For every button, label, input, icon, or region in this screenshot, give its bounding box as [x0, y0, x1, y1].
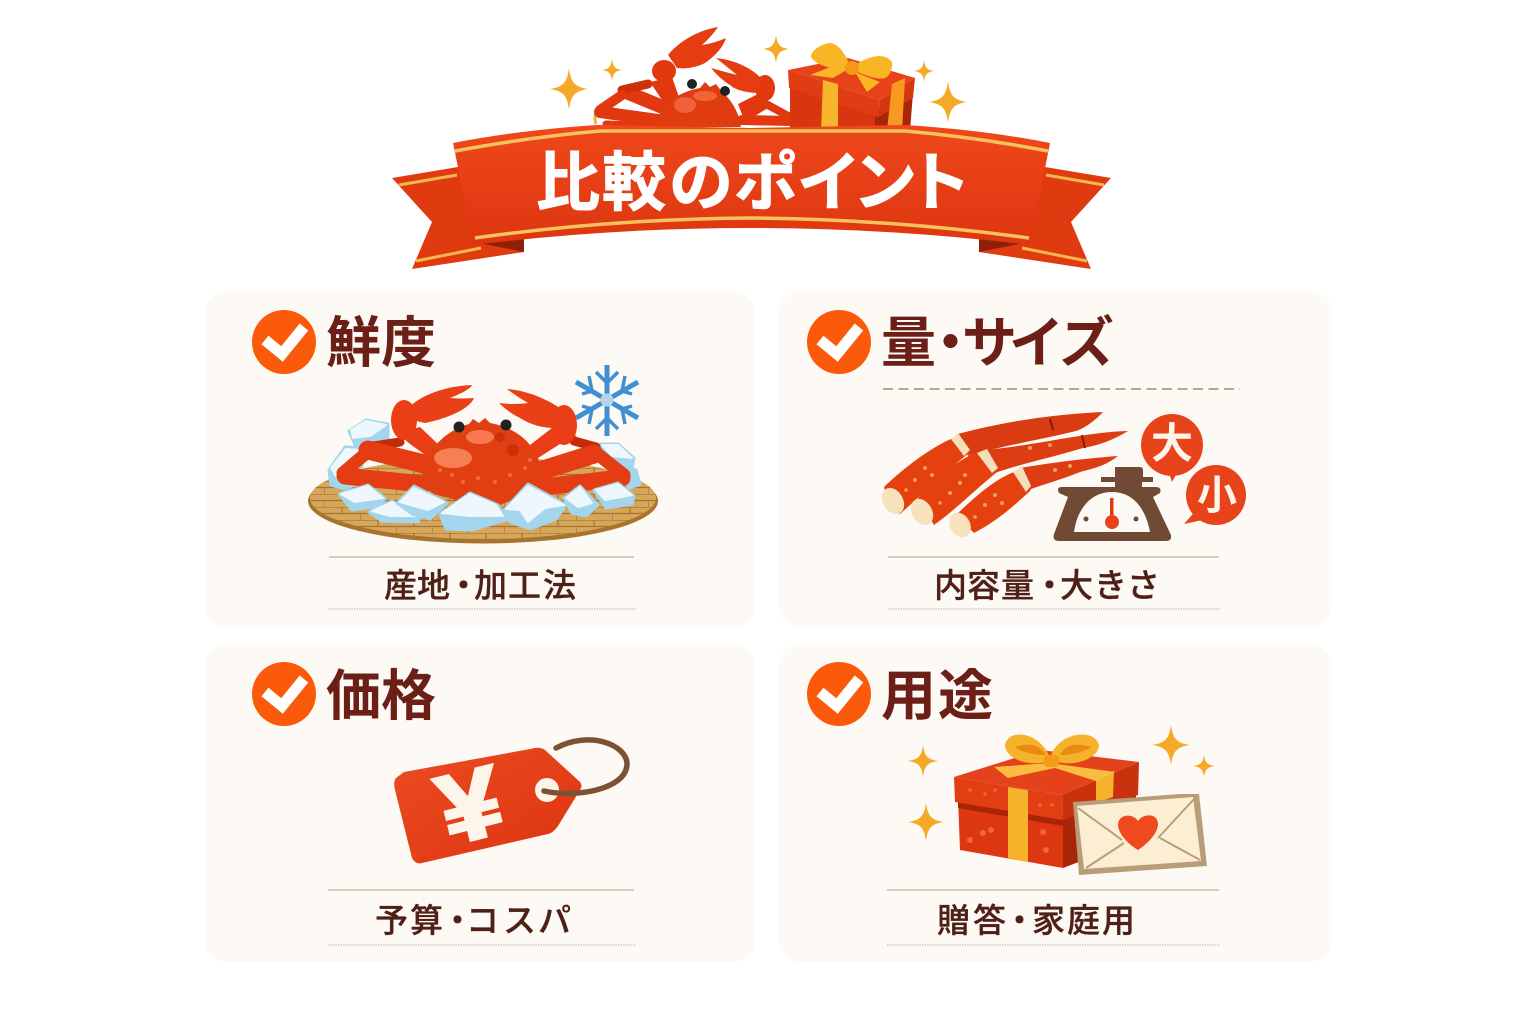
- callout: 小: 小: [1197, 474, 1237, 518]
- illustration: crab on ice tray: [308, 385, 658, 544]
- label: 贈答・家庭用: [937, 902, 1135, 939]
- icon: check: [252, 662, 316, 726]
- icon: gift box: [954, 734, 1139, 868]
- ribbon main band: [453, 125, 1050, 245]
- icon: kitchen scale: [1054, 467, 1171, 541]
- right ribbon tail: [979, 165, 1111, 269]
- crab: [343, 385, 624, 505]
- label: 内容量・大きさ: [934, 567, 1160, 604]
- panel: 用途: [779, 644, 1332, 962]
- icon: yen price tag: [394, 740, 627, 866]
- tray: [308, 457, 658, 544]
- leg 3: [945, 456, 1118, 541]
- dashed divider: [883, 388, 1240, 390]
- front ice: [339, 483, 634, 530]
- icon: snowflake: [576, 365, 638, 436]
- divider lines: [328, 890, 636, 945]
- title ribbon banner: [392, 125, 1111, 269]
- panel: 価格: [205, 644, 755, 962]
- callout: 大: 大: [1151, 420, 1193, 467]
- heading: 鮮度: 鮮度: [326, 312, 436, 374]
- icon: envelope with heart: [1073, 794, 1207, 875]
- illustration: crab legs: [877, 412, 1128, 541]
- icon: check: [252, 310, 316, 374]
- panel: 鮮度: [205, 291, 755, 627]
- header illustration: crab, gift and sparkles: [550, 27, 967, 131]
- sparkles: [550, 35, 967, 123]
- icon: yen price tag: ¥: [428, 746, 513, 866]
- back ice: [329, 420, 640, 489]
- divider lines: [888, 557, 1220, 609]
- callout: 小: [1184, 465, 1246, 525]
- title: 比較のポイント: [536, 147, 971, 219]
- callout: 大: [1141, 414, 1203, 482]
- heading: 量・サイズ: 量・サイズ: [881, 312, 1114, 374]
- label: 産地・加工法: [384, 567, 576, 604]
- icon: header crab: [595, 27, 804, 128]
- divider lines: [329, 557, 636, 609]
- icon: check: [807, 310, 871, 374]
- panel: 量・サイズ: [779, 291, 1332, 627]
- divider lines: [887, 890, 1220, 945]
- heading: 用途: 用途: [881, 665, 993, 727]
- sparkles: [908, 725, 1215, 841]
- leg 1: [877, 412, 1103, 518]
- heading: 価格: 価格: [326, 665, 436, 727]
- icon: check: [807, 662, 871, 726]
- left ribbon tail: [392, 165, 524, 269]
- icon: header gift box: [788, 43, 915, 131]
- leg 2: [906, 431, 1128, 529]
- label: 予算・コスパ: [375, 902, 571, 939]
